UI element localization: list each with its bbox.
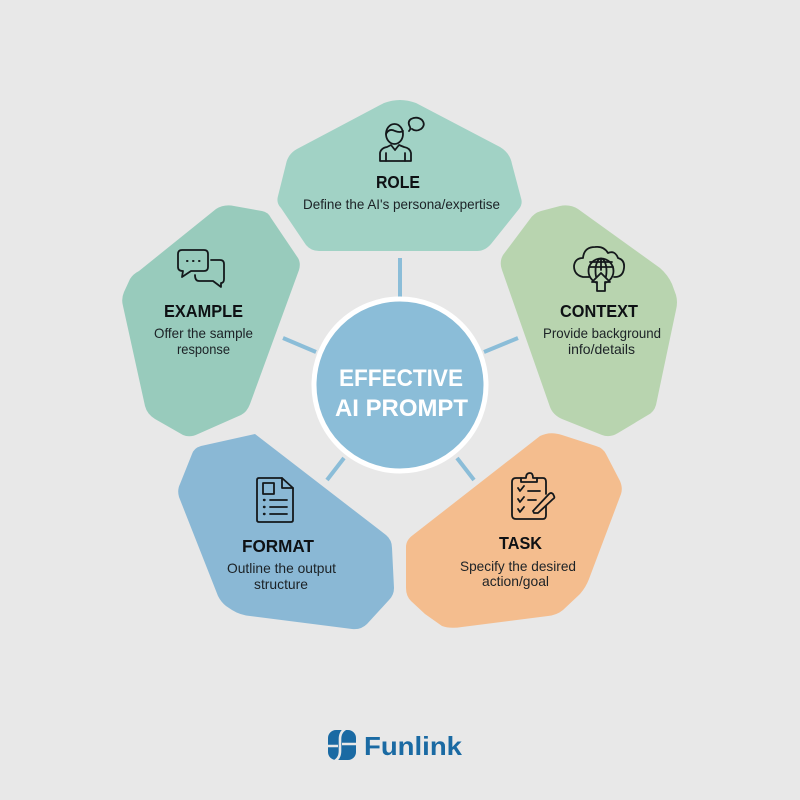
panel: format [178, 434, 394, 629]
description: format [227, 560, 336, 592]
description: format: structure [254, 576, 308, 592]
heading: role: ROLE [376, 172, 420, 192]
heading: example: EXAMPLE [164, 301, 243, 321]
panel: role [277, 100, 522, 251]
description: task: action/goal [482, 573, 549, 589]
logo wordmark: Funlink [364, 731, 463, 761]
icon: person with speech bubble [380, 118, 424, 161]
logo: funlink [326, 728, 463, 762]
heading: context: CONTEXT [560, 301, 638, 321]
description: context: Provide background [543, 325, 661, 341]
spokes [283, 258, 518, 480]
description: format: Outline the output [227, 560, 336, 576]
center circle [314, 299, 486, 471]
description: example: response [177, 341, 230, 357]
icon: cloud with globe [574, 247, 624, 291]
description: context [543, 325, 661, 357]
description: context: info/details [568, 341, 635, 357]
description: role: Define the AI's persona/expertise [303, 196, 500, 212]
description: example [154, 325, 253, 357]
center title: AI PROMPT [335, 395, 468, 422]
icon: document [257, 478, 293, 522]
description: task: Specify the desired [460, 558, 576, 574]
panel: example [122, 205, 300, 436]
center title: EFFECTIVE [339, 365, 463, 392]
heading: format: FORMAT [242, 536, 314, 556]
description: task [460, 558, 576, 589]
panel: context [501, 205, 677, 436]
icon: clipboard with pencil [512, 473, 554, 519]
heading: task: TASK [499, 533, 542, 553]
panel: task [406, 433, 622, 628]
description: example: Offer the sample [154, 325, 253, 341]
icon: speech bubbles [178, 250, 224, 287]
center title [335, 365, 468, 422]
